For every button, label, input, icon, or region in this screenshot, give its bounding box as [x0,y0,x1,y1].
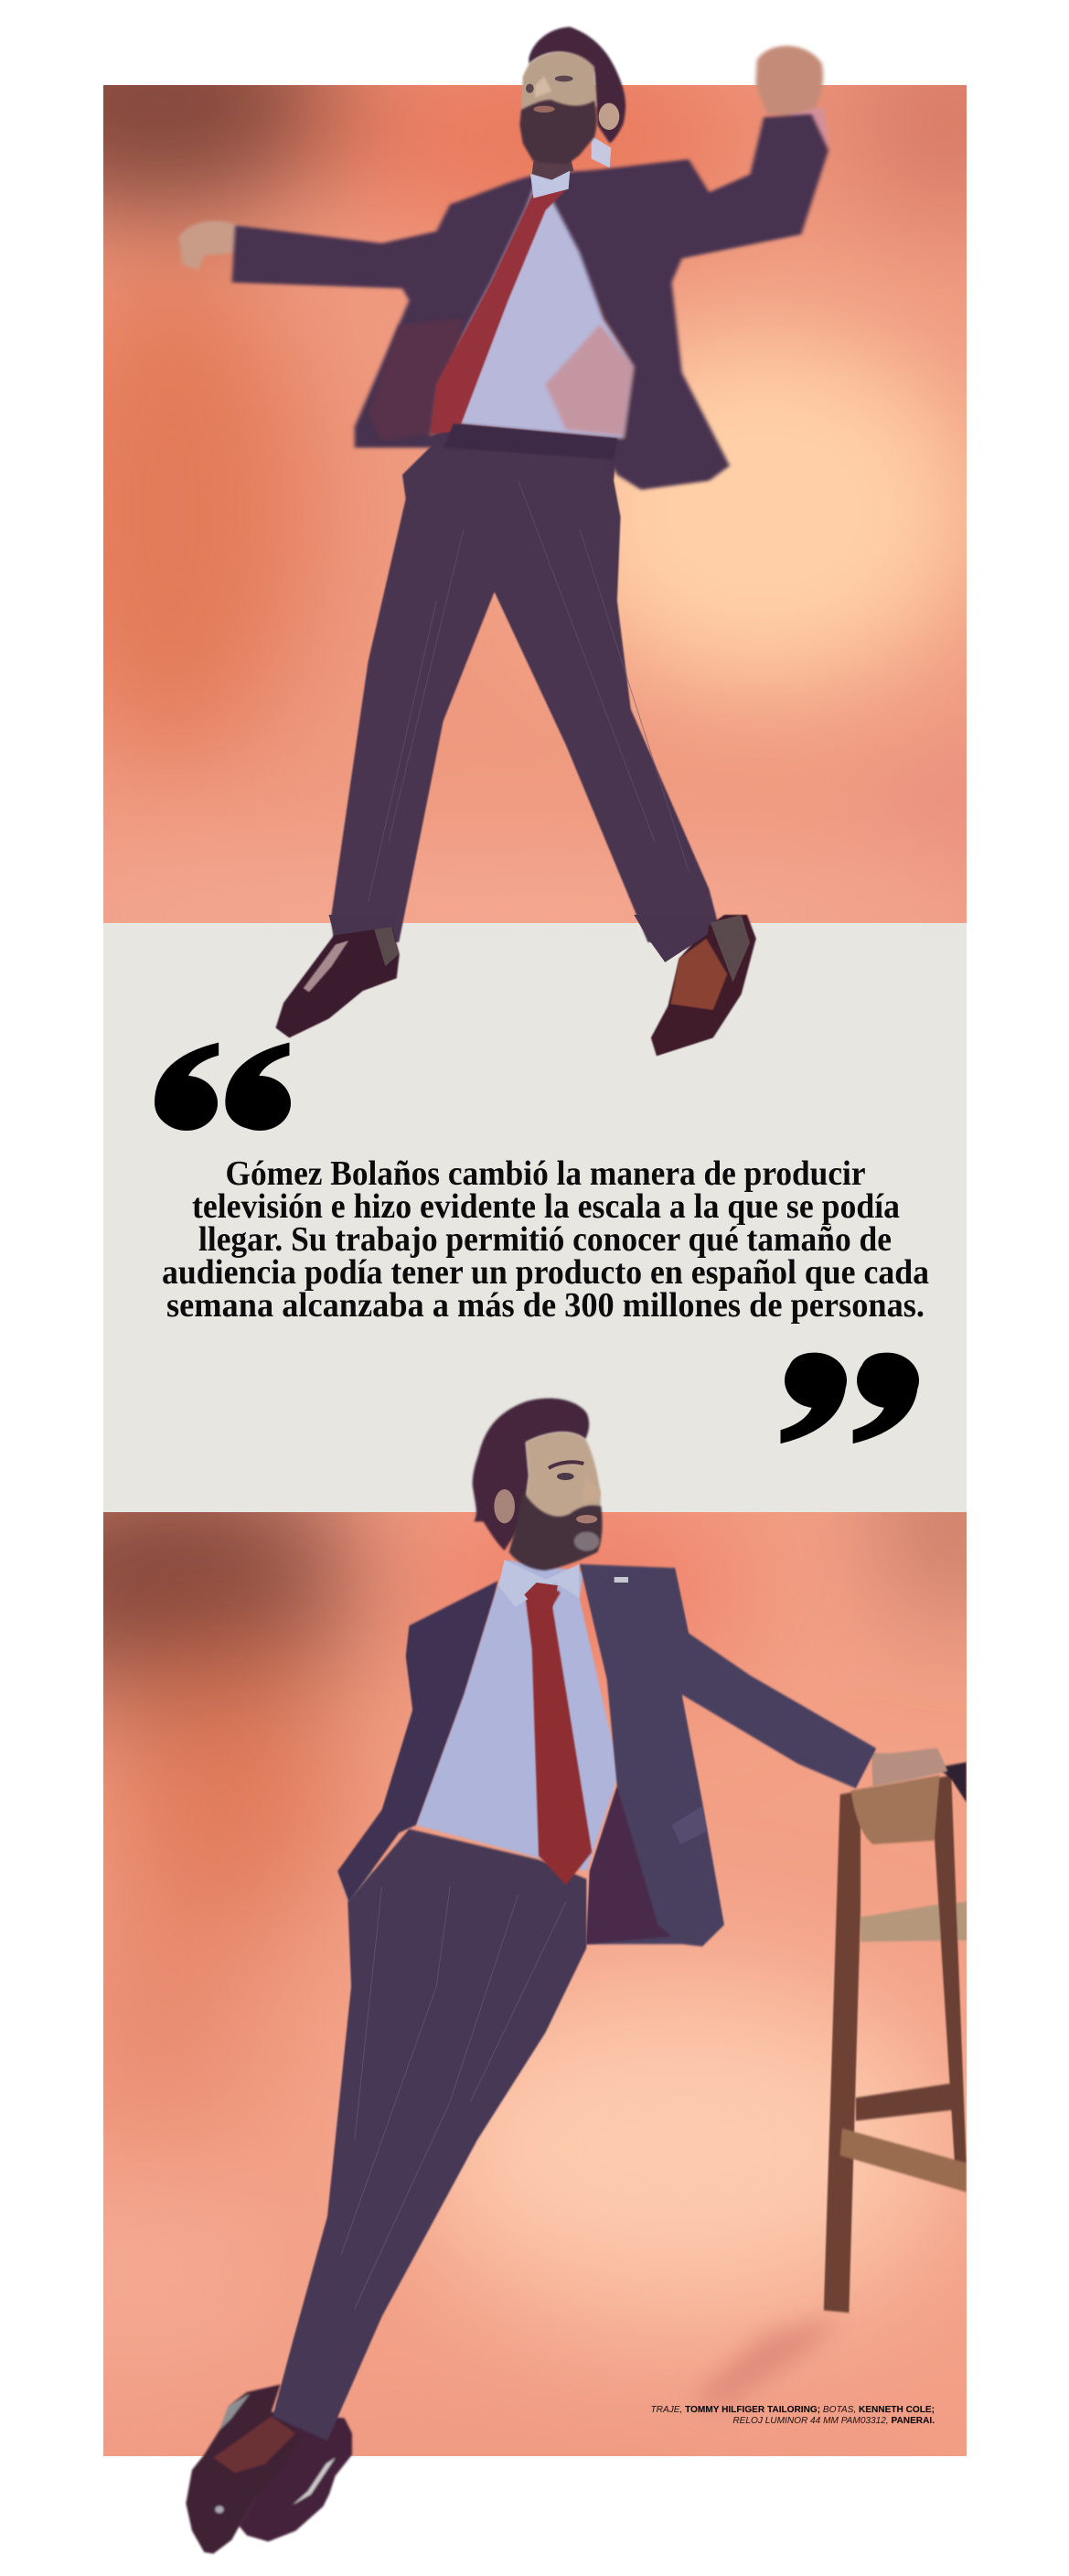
rear boot shine [293,2458,336,2505]
figure: jumping man in suit [178,46,828,942]
caption: credits: RELOJ LUMINOR 44 MM PAM03312, PANERAI. [732,2416,935,2426]
panel: bottom photo background [103,1512,967,2456]
lips [576,1515,597,1523]
tie knot [524,1583,558,1610]
right boot [651,915,756,1056]
stool seat [861,1902,967,1942]
jacket right side [580,1564,876,1947]
stool [824,1762,967,2313]
stool rung front [840,2129,967,2192]
hair [473,1398,589,1551]
left boot [275,924,400,1037]
right boot elastic [711,915,750,982]
right trouser hem [634,915,711,962]
front boot top shine [219,2394,250,2431]
trouser stripes [341,1886,566,2309]
raised fist [755,46,823,117]
right hand on stool [871,1748,948,1787]
caption: credits: TRAJE, TOMMY HILFIGER TAILORING; BOTAS, KENNETH COLE; [651,2405,935,2415]
pocket hand [337,1865,389,1904]
tie [525,1581,592,1885]
text: pull quote: semana alcanzaba a más de 300 millones de personas. [166,1286,925,1325]
right boot tan panel [670,939,727,1010]
jacket lower left lining [369,318,464,442]
stool left leg [824,1790,861,2313]
text: pull quote: audiencia podía tener un producto en español que cada [162,1253,929,1292]
brow [549,1462,583,1468]
figure: crossed boots [186,2385,352,2554]
tie [431,180,566,434]
left trouser hem [329,915,397,936]
collar [498,1560,579,1607]
caption: credits [651,2405,935,2426]
ear [494,1489,515,1523]
panel: top photo background [103,85,967,923]
lips [533,106,555,113]
rear boot [240,2412,352,2541]
jacket left side [337,1581,497,1902]
shirt [416,1561,617,1872]
front boot brown upper [213,2417,295,2473]
stool backrest [851,1776,940,1844]
figure: head looking up [519,27,625,199]
beard [519,100,596,165]
neck [532,156,573,180]
beard grey chin [574,1531,600,1551]
jacket [232,114,828,489]
trousers [273,1829,586,2441]
shirt cuff [791,107,828,147]
left boot elastic [374,925,399,966]
jacket pocket [672,1806,707,1844]
text: pull quote: Gómez Bolaños cambió la manera de producir [225,1154,866,1193]
face [523,1433,601,1528]
jacket lining [586,1787,672,1944]
collar behind ear [592,135,611,167]
trousers [331,424,722,942]
ear [599,103,619,130]
nose [535,76,551,98]
stool shadow [700,2314,834,2409]
shirt [457,175,635,439]
lapel pin [615,1577,628,1583]
panel: quote background [103,923,967,1512]
stool rung back [856,2082,960,2120]
quote mark: closing: ” [768,1285,933,1618]
eye [557,1473,574,1480]
text: pull quote: televisión e hizo evidente la escala a la que se podía [192,1187,900,1226]
eyes [555,76,573,81]
beard [509,1491,603,1571]
nose [583,1476,601,1503]
left hand [178,220,244,271]
stool dark corner [937,1762,967,1802]
toe shine [215,2506,224,2513]
stool right leg [931,1776,967,2163]
collar front [530,171,570,199]
trouser stripes [369,481,689,901]
figure: head in profile [473,1398,628,1610]
figure: lower legs and boots over quote panel [275,915,756,1056]
figure: man leaning on stool [273,1561,967,2441]
shirt shading [546,325,635,435]
hair [529,27,625,144]
text: pull quote [162,1154,929,1325]
face [521,52,597,112]
left boot highlight [304,940,348,993]
belt [444,424,617,460]
front boot [186,2385,302,2554]
text: pull quote: llegar. Su trabajo permitió conocer qué tamaño de [198,1220,892,1259]
quote mark: opening: “ [139,979,300,1296]
